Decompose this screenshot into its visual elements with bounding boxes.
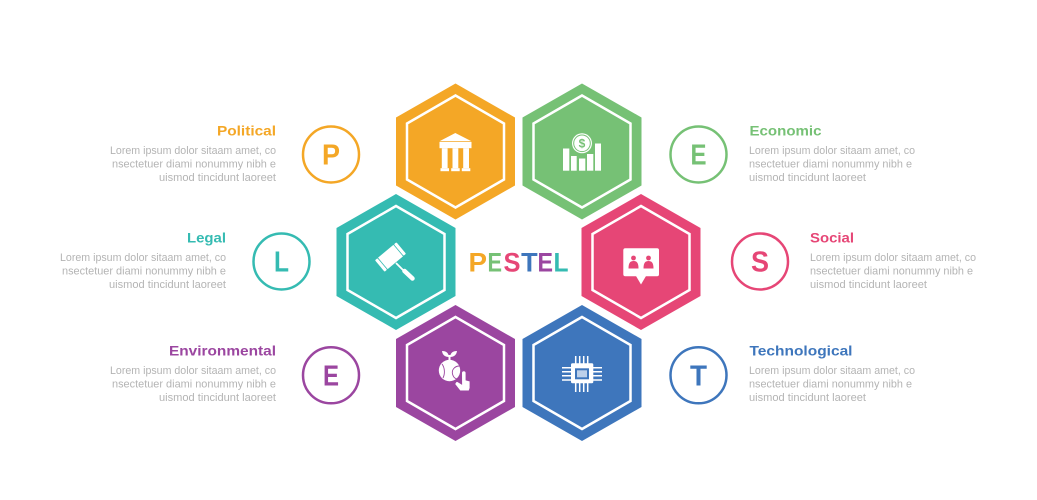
panel: economic: uismod tincidunt laoreet <box>749 172 866 184</box>
letter circle: P <box>303 126 359 182</box>
panel: technological: Technological <box>750 343 852 359</box>
panel: technological: Lorem ipsum dolor sitaam amet, co <box>749 365 915 377</box>
hexagon: political <box>396 84 515 220</box>
panel: legal: Lorem ipsum dolor sitaam amet, co <box>60 252 226 264</box>
hexagon: economic <box>522 84 642 220</box>
panel: legal: uismod tincidunt laoreet <box>109 279 226 291</box>
panel: legal: nsectetuer diami nonummy nibh e <box>62 266 226 278</box>
panel: political <box>110 123 276 184</box>
panel: environmental: Lorem ipsum dolor sitaam amet, co <box>110 365 276 377</box>
panel: environmental: uismod tincidunt laoreet <box>159 392 276 404</box>
panel: technological: nsectetuer diami nonummy nibh e <box>749 378 912 390</box>
title: PESTEL: S <box>504 248 520 278</box>
letter circle: E economic: E <box>690 140 706 172</box>
hexagon: environmental <box>396 305 515 441</box>
panel: economic: Economic <box>750 123 822 139</box>
panel: political: nsectetuer diami nonummy nibh e <box>112 158 276 170</box>
panel: social: uismod tincidunt laoreet <box>810 279 927 291</box>
icon: microchip <box>562 356 602 392</box>
panel: economic: nsectetuer diami nonummy nibh e <box>749 158 912 170</box>
icon: globe sprout and hand <box>439 351 470 391</box>
letter circle: L: L <box>274 246 289 278</box>
hexagon: legal <box>336 194 456 330</box>
panel: economic: Lorem ipsum dolor sitaam amet, co <box>749 145 915 157</box>
icon: gavel <box>375 242 412 278</box>
title: PESTEL: E <box>538 248 553 278</box>
panel: social: Social <box>810 230 854 246</box>
icon: chat bubble with people <box>623 248 659 284</box>
icon: bank <box>440 133 472 171</box>
letter circle: E environmental <box>303 347 359 403</box>
panel: social: Lorem ipsum dolor sitaam amet, co <box>810 252 976 264</box>
title: PESTEL: E <box>488 248 502 278</box>
panel: social: nsectetuer diami nonummy nibh e <box>810 266 973 278</box>
panel: environmental: Environmental <box>169 343 276 359</box>
letter circle: E environmental: E <box>323 360 339 392</box>
panel: political: Lorem ipsum dolor sitaam amet, co <box>110 145 276 157</box>
title: PESTEL: L <box>554 248 568 278</box>
letter circle: T: T <box>690 360 707 392</box>
letter circle: L <box>254 234 310 290</box>
title: PESTEL <box>468 248 568 278</box>
letter circle: T <box>670 347 726 403</box>
panel: environmental: nsectetuer diami nonummy nibh e <box>112 378 276 390</box>
panel: technological: uismod tincidunt laoreet <box>749 392 866 404</box>
panel: technological <box>749 343 915 404</box>
letter circle: S <box>732 234 788 290</box>
title: PESTEL: T <box>521 248 538 278</box>
panel: political: uismod tincidunt laoreet <box>159 172 276 184</box>
hexagon: technological <box>522 305 642 441</box>
panel: legal: Legal <box>187 230 226 246</box>
letter circle: P: P <box>322 140 340 172</box>
icon: chart with coin: $ <box>579 136 586 150</box>
panel: economic <box>749 123 915 184</box>
panel: political: Political <box>217 123 276 139</box>
panel: environmental <box>110 343 276 404</box>
letter circle: E economic <box>670 126 726 182</box>
panel: social <box>810 230 976 291</box>
panel: legal <box>60 230 226 291</box>
title: PESTEL: P <box>468 248 487 278</box>
hexagon: social <box>582 194 700 330</box>
letter circle: S: S <box>751 246 769 278</box>
